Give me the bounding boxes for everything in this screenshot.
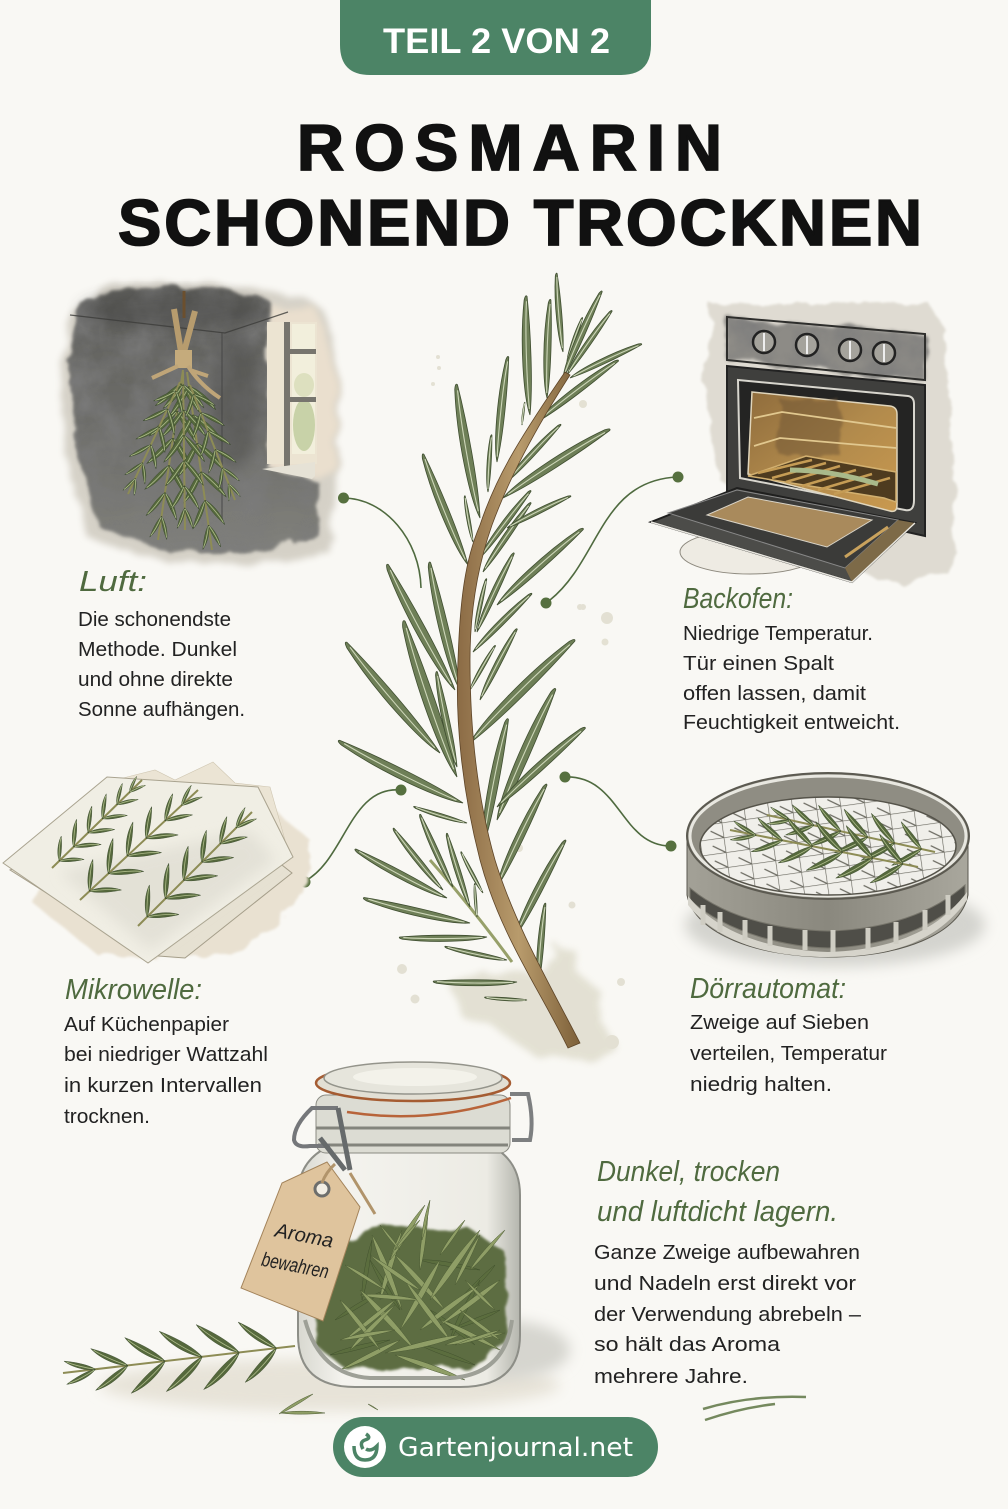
stem [457, 372, 580, 1048]
description: niedrig halten. [690, 1073, 832, 1096]
description [690, 1011, 887, 1096]
heading: und luftdicht lagern. [597, 1196, 838, 1228]
description: offen lassen, damit [683, 682, 866, 705]
heading: Dunkel, trocken [597, 1156, 780, 1188]
tag [241, 1162, 375, 1321]
description: in kurzen Intervallen [64, 1074, 262, 1097]
heading: Mikrowelle: [65, 974, 202, 1006]
panel: Luft [60, 280, 338, 721]
swoosh [703, 1397, 806, 1420]
title [118, 111, 922, 259]
description: so hält das Aroma [594, 1333, 781, 1356]
description: Sonne aufhängen. [78, 698, 245, 721]
description: Methode. Dunkel [78, 638, 237, 661]
panel: Backofen [651, 300, 955, 734]
description [683, 622, 900, 734]
description [64, 1013, 268, 1128]
text block: storage advice [594, 1156, 862, 1420]
tag: bewahren [260, 1249, 331, 1283]
heading [597, 1156, 838, 1228]
description: mehrere Jahre. [594, 1365, 748, 1388]
description: verteilen, Temperatur [690, 1042, 887, 1065]
illustration: rosemary on kitchen paper [3, 762, 313, 963]
jar lid and clamp [294, 1062, 532, 1170]
heading: Dörrautomat: [690, 973, 846, 1005]
badge: part label: TEIL 2 VON 2 [383, 22, 610, 61]
panel: Mikrowelle [3, 762, 313, 1128]
central rosemary branch [336, 273, 643, 1060]
illustration: storage jar with tag and sprig [59, 1062, 570, 1415]
description: bei niedriger Wattzahl [64, 1043, 268, 1066]
connector lines [300, 472, 684, 888]
description: Niedrige Temperatur. [683, 622, 873, 645]
footer brand pill [333, 1417, 658, 1477]
description: Die schonendste [78, 608, 231, 631]
watercolor stain [397, 355, 625, 1060]
description: und ohne direkte [78, 668, 233, 691]
description: Tür einen Spalt [683, 652, 834, 675]
loose needles [278, 1393, 378, 1415]
heading: Luft: [79, 566, 147, 598]
illustration: dehydrator tray [685, 773, 985, 967]
badge: part label [340, 0, 651, 75]
heading: Backofen: [683, 583, 793, 615]
illustration: open oven [651, 300, 955, 582]
illustration: hanging rosemary in a dark room [60, 280, 338, 562]
description: Auf Küchenpapier [64, 1013, 229, 1036]
icon: logo [344, 1426, 386, 1468]
footer brand pill: Gartenjournal.net [398, 1433, 633, 1463]
description: Feuchtigkeit entweicht. [683, 711, 900, 734]
title: SCHONEND TROCKNEN [118, 186, 922, 259]
panel: Dörrautomat [685, 773, 985, 1096]
title: ROSMARIN [297, 111, 722, 184]
jar body [298, 1150, 520, 1387]
tag: Aroma [272, 1220, 335, 1253]
description: trocknen. [64, 1105, 150, 1128]
description [78, 608, 245, 721]
loose sprig [59, 1311, 299, 1409]
description: und Nadeln erst direkt vor [594, 1272, 856, 1295]
description: Ganze Zweige aufbewahren [594, 1241, 860, 1264]
description: Zweige auf Sieben [690, 1011, 869, 1034]
description: der Verwendung abrebeln – [594, 1303, 862, 1326]
description [594, 1241, 862, 1388]
